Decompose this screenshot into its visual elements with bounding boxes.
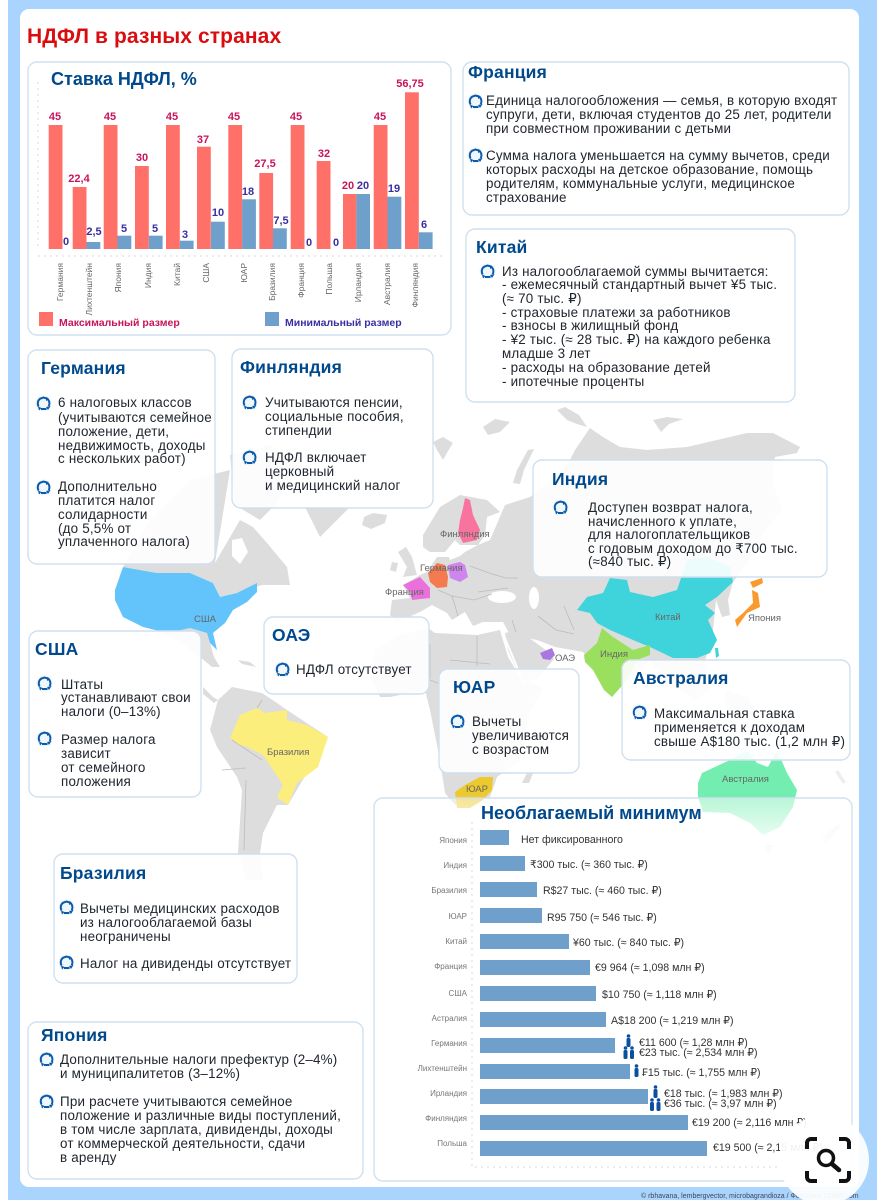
- panel: Finland: НДФЛ включает: [265, 450, 367, 465]
- panel: Finland: и медицинский налог: [265, 478, 401, 493]
- country labels: ЮАР: [448, 912, 467, 921]
- panel: China: Из налогооблагаемой суммы вычитается:: [502, 264, 769, 279]
- values: Нет фиксированного: [521, 834, 623, 846]
- values: ¥60 тыс. (≈ 840 тыс. ₽): [572, 937, 684, 949]
- panel: China: младше 3 лет: [502, 346, 591, 361]
- panel: Japan: и муниципалитетов (3–12%): [60, 1066, 240, 1081]
- panel: France: супруги, дети, включая студентов до 25 лет, родители: [486, 107, 832, 122]
- panel: Finland: стипендии: [265, 423, 332, 438]
- UAE: [540, 648, 555, 660]
- max values: 45: [290, 111, 302, 123]
- panel: South Africa: увеличиваются: [472, 728, 569, 743]
- max bars: [49, 92, 419, 249]
- panel: China: - взносы в жилищный фонд: [502, 318, 678, 333]
- panel: Germany: Германия: [41, 358, 126, 378]
- max values: 32: [318, 148, 330, 160]
- panel: China: - ипотечные проценты: [502, 374, 644, 389]
- country labels: Астралия: [432, 1014, 467, 1023]
- panel: Brazil: неограничены: [80, 929, 171, 944]
- panel: Germany: солидарности: [58, 507, 148, 522]
- country labels: Япония: [113, 263, 123, 293]
- max values: 45: [374, 111, 386, 123]
- France: [403, 577, 430, 600]
- panel: USA: зависит: [61, 746, 111, 761]
- panel: Germany: (до 5,5% от: [58, 521, 131, 536]
- panel: China: Китай: [476, 237, 528, 257]
- Australia: [698, 750, 797, 835]
- panel: China: - ¥2 тыс. (≈ 28 тыс. ₽) на каждого ребенка: [502, 332, 771, 347]
- panel: USA: Размер налога: [61, 732, 156, 747]
- values: €18 тыс. (≈ 1,983 млн ₽): [664, 1088, 783, 1100]
- panel: South Africa: с возрастом: [472, 742, 549, 757]
- country labels: Индия: [443, 861, 467, 870]
- max values: 45: [166, 111, 178, 123]
- world map: [123, 407, 846, 880]
- max values: 27,5: [254, 158, 276, 170]
- panel: Australia: применяется к доходам: [654, 720, 805, 735]
- Finland: [458, 498, 480, 543]
- max values: 56,75: [396, 78, 424, 90]
- max values: 30: [136, 152, 148, 164]
- min values: 10: [212, 207, 224, 219]
- max values: 22,4: [68, 173, 91, 185]
- panel: Australia: свыше A$180 тыс. (1,2 млн ₽): [654, 734, 845, 749]
- panel: Germany: Дополнительно: [58, 479, 157, 494]
- country labels: Индия: [143, 263, 153, 288]
- panel: UAE: ОАЭ: [272, 625, 310, 645]
- South Africa: [455, 777, 493, 808]
- country labels: США: [449, 989, 468, 998]
- label: Индия: Индия: [600, 649, 628, 660]
- country labels: Австралия: [382, 263, 392, 305]
- panel: India: для налогоплательщиков: [588, 527, 750, 542]
- panel: Brazil: Вычеты медицинских расходов: [80, 901, 280, 916]
- panel: Japan: от коммерческой деятельности, сдачи: [60, 1136, 305, 1151]
- panel: USA: Штаты: [61, 677, 103, 692]
- min values: 0: [333, 237, 339, 249]
- bars: [480, 830, 707, 1156]
- country labels: Бразилия: [267, 263, 277, 301]
- panel: tax-free minimum chart: [374, 798, 852, 1181]
- values: A$18 200 (≈ 1,219 млн ₽): [611, 1015, 734, 1027]
- Poland: [448, 562, 468, 582]
- values: €19 500 (≈ 2,15 млн ₽): [713, 1142, 823, 1154]
- panel: Germany: (учитываются семейное: [58, 410, 212, 425]
- panel: France: страхование: [486, 190, 567, 205]
- country labels: Ирландия: [353, 263, 363, 302]
- chart heading: Ставка НДФЛ, %: [51, 69, 197, 89]
- panel: Finland: Учитываются пенсии,: [265, 395, 403, 410]
- country labels: Польша: [324, 263, 334, 295]
- panel: Japan: в том числе зарплата, дивиденды, доходы: [60, 1122, 333, 1137]
- legend: Максимальный размер: [59, 317, 180, 329]
- panel: South Africa: ЮАР: [453, 677, 496, 697]
- values: €23 тыс. (≈ 2,534 млн ₽): [639, 1047, 758, 1059]
- panel: Australia: Максимальная ставка: [654, 706, 795, 721]
- max values: 45: [228, 111, 240, 123]
- legend: [39, 312, 402, 329]
- values: [521, 834, 823, 1154]
- title: НДФЛ в разных странах: [27, 25, 281, 48]
- panel: South Africa: [439, 669, 579, 773]
- label: ЮАР: ЮАР: [466, 784, 488, 795]
- axes: [472, 822, 800, 1167]
- panel: France: Единица налогообложения — семья, в которую входят: [486, 93, 837, 108]
- max values: 37: [197, 134, 209, 146]
- country labels: Германия: [431, 1039, 467, 1048]
- values: €11 600 (≈ 1,28 млн ₽): [639, 1037, 748, 1049]
- values: €19 200 (≈ 2,116 млн ₽): [692, 1117, 807, 1129]
- chart heading: Необлагаемый минимум: [481, 803, 702, 823]
- panel: India: (≈840 тыс. ₽): [588, 554, 671, 569]
- panel: India: с годовым доходом до ₹700 тыс.: [588, 541, 798, 556]
- panel: USA: устанавливают свои: [61, 690, 191, 705]
- country labels: Япония: [439, 836, 467, 845]
- min values: 2,5: [86, 226, 102, 238]
- panel: France: родителям, коммунальные услуги, медицинское: [486, 176, 795, 191]
- person icons: [624, 1034, 660, 1111]
- country labels: Финляндия: [410, 263, 420, 307]
- country labels: ЮАР: [239, 263, 249, 283]
- label: Китай: Китай: [655, 612, 681, 623]
- label: Финляндия: Финляндия: [440, 529, 490, 540]
- min values: [63, 180, 427, 249]
- panel: Australia: Австралия: [633, 668, 729, 688]
- values: €9 964 (≈ 1,098 млн ₽): [595, 962, 705, 974]
- min values: 18: [242, 186, 254, 198]
- panel: China: - расходы на образование детей: [502, 360, 711, 375]
- panel: France: при совместном проживании с детьми: [486, 121, 731, 136]
- panel: Brazil: Налог на дивиденды отсутствует: [80, 956, 291, 971]
- country labels: [55, 263, 420, 316]
- panel: UAE: НДФЛ отсутствует: [296, 662, 412, 677]
- panel: France: Сумма налога уменьшается на сумму вычетов, среди: [486, 148, 830, 163]
- max values: 45: [49, 111, 61, 123]
- country labels: Китай: [172, 263, 182, 286]
- label: Бразилия: Бразилия: [267, 747, 309, 758]
- panel: India: [533, 460, 827, 577]
- panel: Finland: церковный: [265, 464, 334, 479]
- country labels: Китай: [445, 937, 467, 946]
- country labels: Лихтенштейн: [84, 263, 94, 316]
- panel: USA: от семейного: [61, 760, 146, 775]
- panel: Germany: положение, дети,: [58, 424, 169, 439]
- panel: Finland: [232, 349, 433, 508]
- min values: 3: [182, 229, 188, 241]
- label: США: США: [194, 614, 217, 625]
- values: ₹300 тыс. (≈ 360 тыс. ₽): [530, 859, 648, 871]
- values: ₣15 тыс. (≈ 1,755 млн ₽): [642, 1067, 761, 1079]
- panel: Brazil: из налогооблагаемой базы: [80, 915, 252, 930]
- Germany: [428, 563, 448, 588]
- country labels: [418, 836, 468, 1148]
- panel: South Africa: Вычеты: [472, 714, 522, 729]
- Brazil: [230, 708, 328, 805]
- panel: India: Индия: [552, 469, 608, 489]
- min values: 0: [63, 236, 69, 248]
- country labels: Ирландия: [430, 1089, 467, 1098]
- min values: 19: [388, 183, 400, 195]
- panel: Germany: [28, 350, 215, 564]
- panel: India: Доступен возврат налога,: [588, 500, 753, 515]
- panel: Germany: недвижимость, доходы: [58, 438, 206, 453]
- min values: 0: [306, 237, 312, 249]
- seas and borders: [222, 538, 574, 850]
- country labels: Лихтенштейн: [418, 1064, 467, 1073]
- panel: USA: налоги (0–13%): [61, 704, 161, 719]
- China: [577, 557, 733, 658]
- values: R$27 тыс. (≈ 460 тыс. ₽): [543, 885, 662, 897]
- India: [584, 628, 650, 697]
- panel: China: [466, 229, 795, 402]
- copyright: © rbhavana, lembergvector, microbagrandioza / Фотобанк 123RF.com: [641, 1192, 859, 1200]
- country labels: Франция: [434, 962, 467, 971]
- label: ОАЭ: ОАЭ: [555, 653, 575, 664]
- label: Австралия: Австралия: [722, 774, 769, 785]
- max values: 20: [342, 180, 354, 192]
- panel: China: (≈ 70 тыс. ₽): [502, 291, 582, 306]
- country labels: Франция: [296, 263, 306, 298]
- panel: Japan: в аренду: [60, 1150, 117, 1165]
- panel: rate chart: [28, 62, 451, 335]
- panel: Japan: Дополнительные налоги префектур (2–4%): [60, 1052, 337, 1067]
- min values: 6: [421, 219, 427, 231]
- panel: France: Франция: [468, 62, 547, 82]
- panel: Germany: уплаченного налога): [58, 534, 190, 549]
- panel: France: [463, 62, 849, 215]
- min values: 20: [357, 180, 369, 192]
- panel: Brazil: Бразилия: [60, 863, 146, 883]
- values: $10 750 (≈ 1,118 млн ₽): [602, 989, 717, 1001]
- legend: Минимальный размер: [285, 317, 402, 329]
- country labels: Польша: [437, 1139, 468, 1148]
- panel: Japan: При расчете учитываются семейное: [60, 1094, 293, 1109]
- country labels: Германия: [55, 263, 65, 301]
- min values: 5: [152, 223, 158, 235]
- panel: China: - страховые платежи за работников: [502, 305, 731, 320]
- panel: Japan: [28, 1022, 363, 1179]
- panel: Japan: Япония: [41, 1025, 108, 1045]
- min bars: [86, 194, 433, 249]
- panel: Brazil: [54, 854, 297, 983]
- Japan: [735, 578, 763, 627]
- country labels: Бразилия: [431, 886, 467, 895]
- panel: USA: положения: [61, 774, 131, 789]
- max values: 45: [104, 111, 116, 123]
- icon: magnifier button: [779, 1115, 869, 1200]
- label: Германия: Германия: [420, 563, 463, 574]
- panel: USA: США: [35, 639, 79, 659]
- panel: Japan: положение и различные виды поступлений,: [60, 1108, 341, 1123]
- panel: Finland: Финляндия: [240, 357, 342, 377]
- panel: UAE: [264, 617, 429, 694]
- label: Япония: Япония: [748, 613, 781, 624]
- panel: India: начисленного к уплате,: [588, 514, 737, 529]
- country labels: Финляндия: [425, 1114, 467, 1123]
- values: €36 тыс. (≈ 3,97 млн ₽): [664, 1098, 777, 1110]
- USA: [115, 567, 257, 650]
- panel: Finland: социальные пособия,: [265, 409, 404, 424]
- min values: 5: [121, 223, 127, 235]
- values: R95 750 (≈ 546 тыс. ₽): [547, 912, 657, 924]
- panel: China: - ежемесячный стандартный вычет ¥5 тыс.: [502, 277, 777, 292]
- panel: Germany: с нескольких работ): [58, 451, 186, 466]
- panel: Australia: [622, 660, 850, 760]
- panel: Germany: платится налог: [58, 493, 155, 508]
- max values: [49, 78, 424, 192]
- country labels: США: [201, 263, 211, 283]
- label: Франция: Франция: [385, 587, 424, 598]
- panel: Germany: 6 налоговых классов: [58, 395, 192, 410]
- axes: [38, 82, 444, 256]
- panel: USA: [29, 631, 201, 797]
- min values: 7,5: [273, 215, 289, 227]
- panel: France: которых расходы на детское образование, помощь: [486, 162, 813, 177]
